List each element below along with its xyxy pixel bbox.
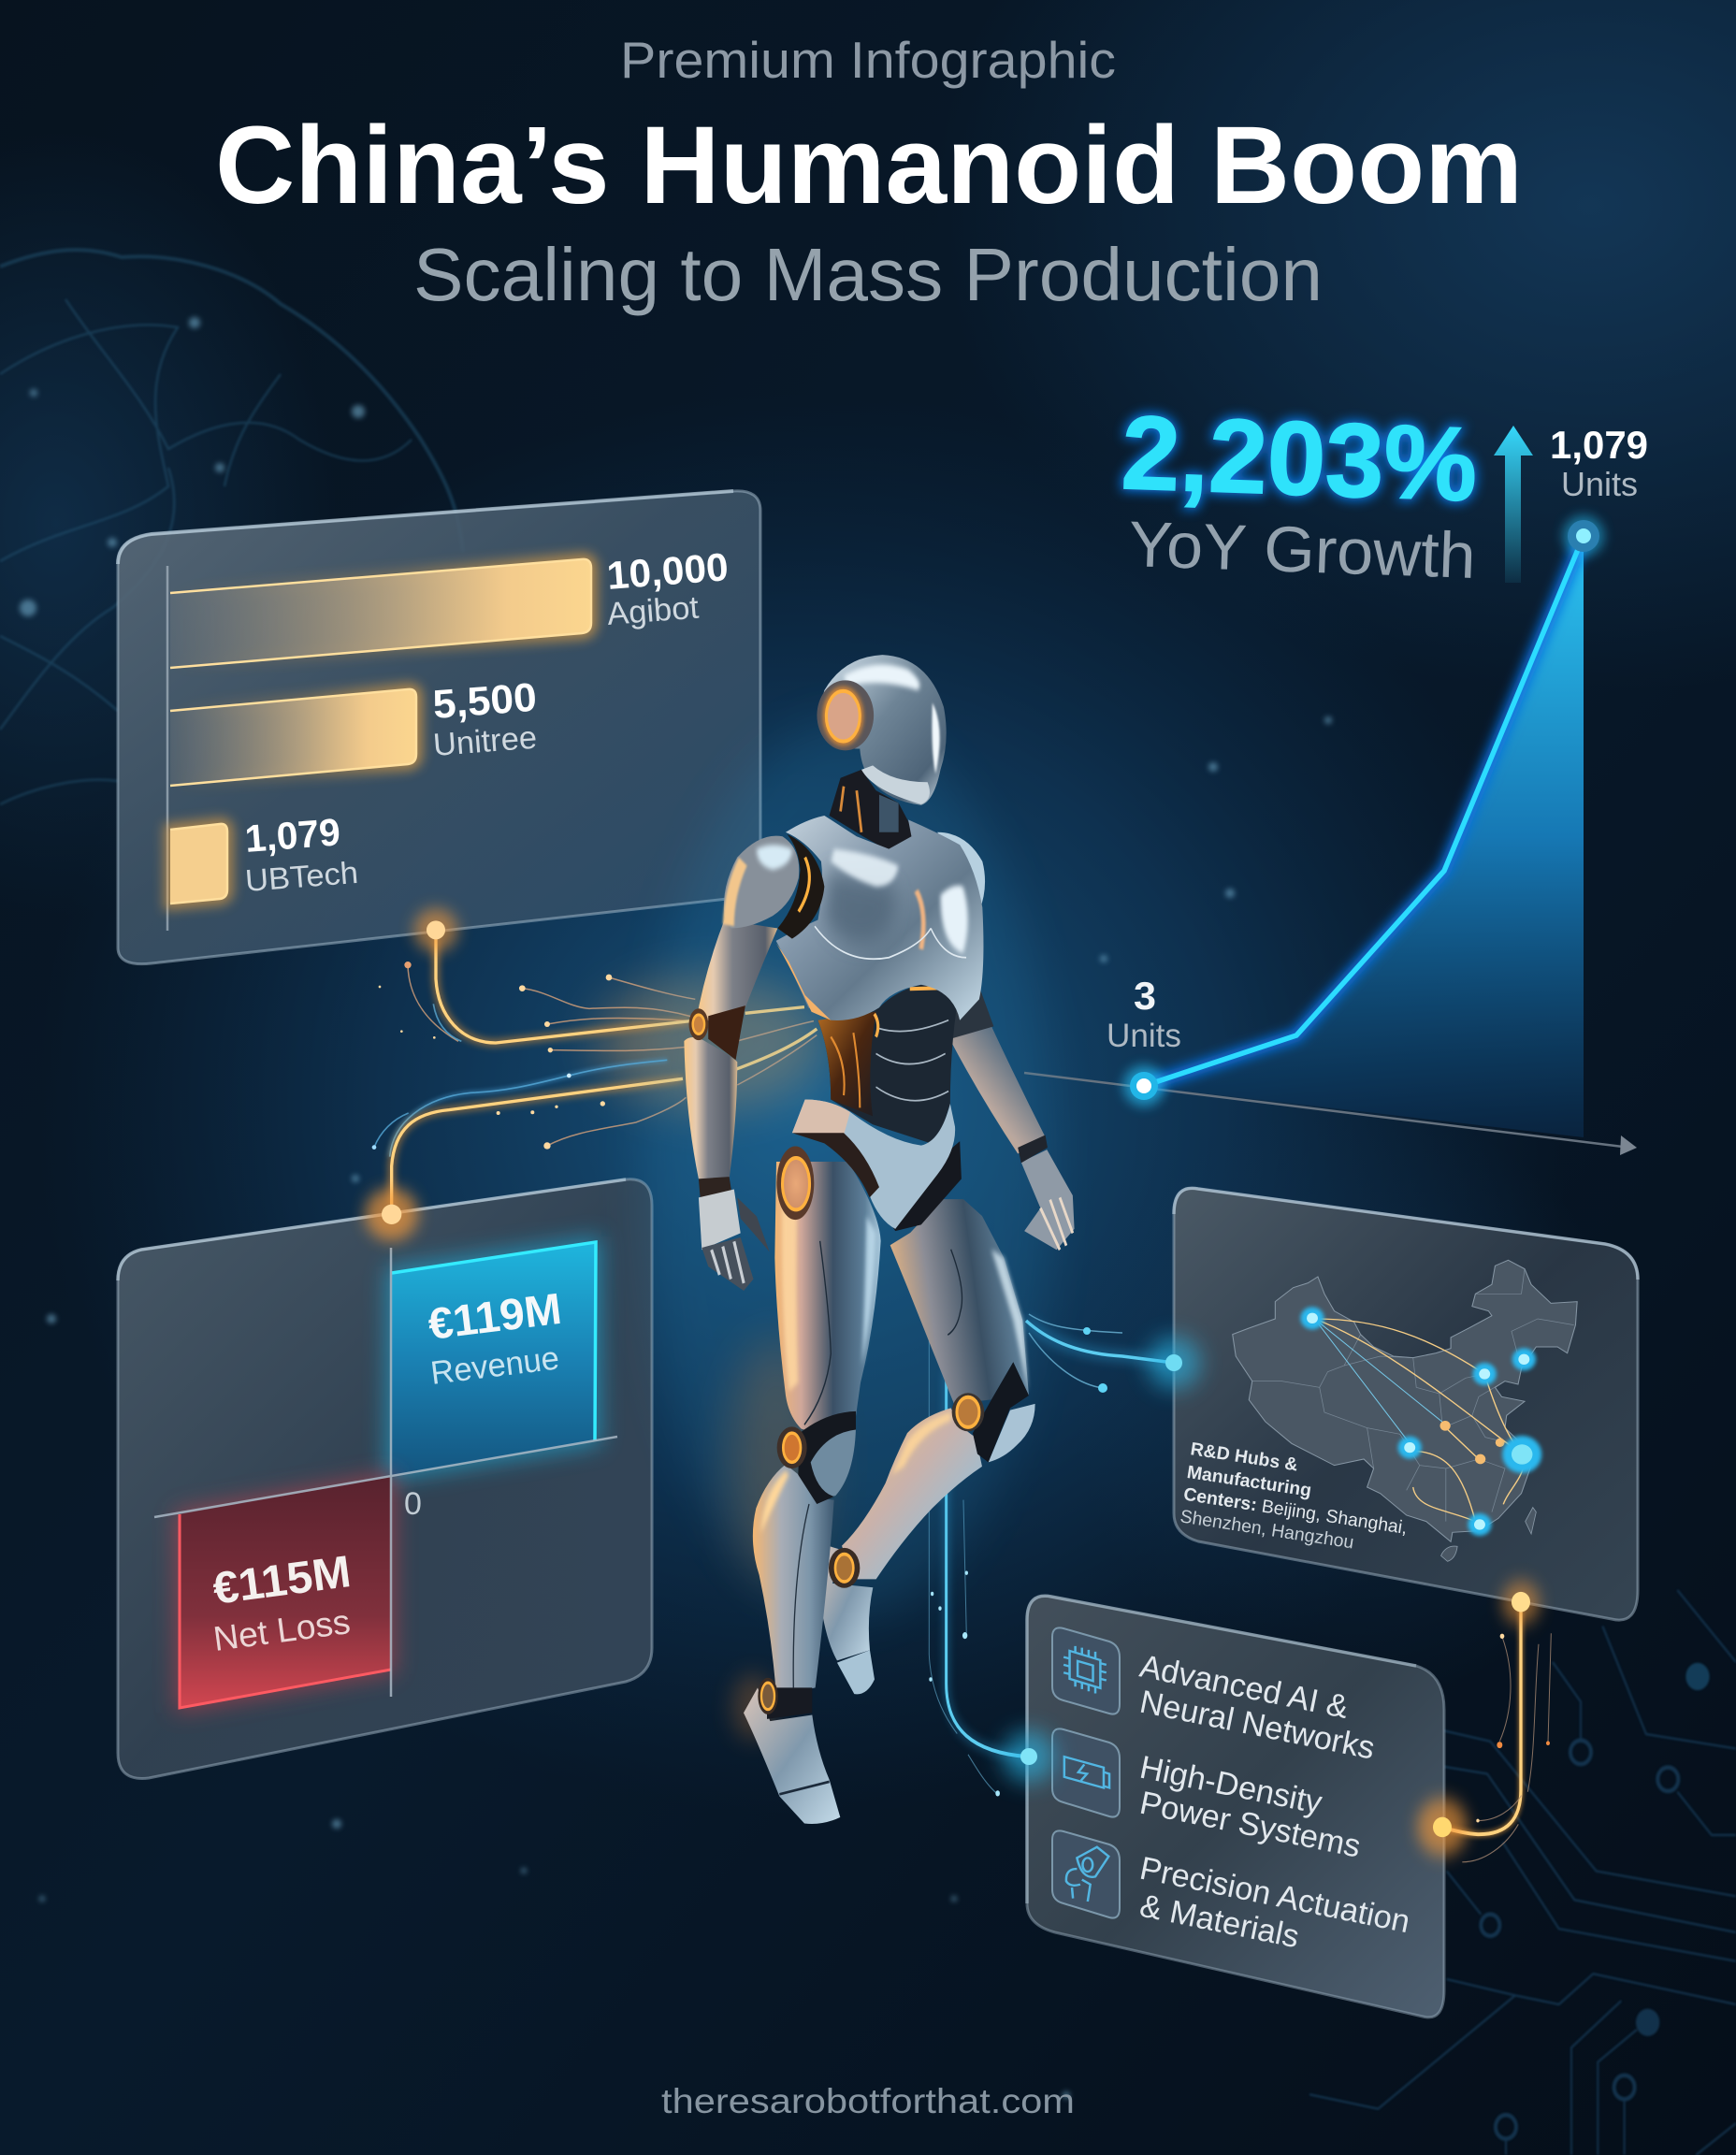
label: 3 units [1107,974,1181,1054]
map of China with hubs [1233,1260,1577,1561]
orange nodes [1439,1421,1505,1464]
routes [1314,1319,1525,1522]
robot figure [641,655,1075,1824]
warm glow behind wires [599,977,823,1108]
label: 10,000 Agibot: Agibot [606,590,701,632]
text: power systems: Power Systems [1136,1786,1364,1865]
country outline [1233,1260,1577,1541]
label: 1,079 UBTech [243,810,359,898]
label: revenue [426,1283,564,1392]
panel: shipments bar chart [118,491,760,964]
title block [215,31,1523,316]
ankle joint [758,1678,778,1714]
footer url: theresarobotforthat.com [661,2082,1075,2120]
growth line [1144,536,1584,1086]
eyebrow: Premium Infographic [620,31,1116,89]
x axis arrow [1024,1073,1637,1155]
net loss bar [180,1477,391,1708]
label: 5,500 Unitree [431,675,538,763]
background circuit traces [1309,1590,1736,2155]
icon: chip [1052,1627,1120,1714]
robot glow [641,720,1052,1741]
callout: 2,203% YoY growth [1120,394,1533,592]
connector: blue wire to map [1026,1314,1174,1393]
end point [1563,515,1604,557]
background neural brain [0,250,463,804]
label: 1,079 units [1550,423,1648,503]
neck [830,770,917,851]
axes [154,1248,617,1697]
start point [1123,1065,1165,1106]
elbow detail [689,1005,745,1060]
abdomen [817,985,957,1146]
blue hubs [1300,1307,1541,1536]
callout: 2,203% YoY growth: 2,203% [1120,394,1479,523]
text: actuation: & Materials [1136,1888,1302,1955]
label: 3 units: Units [1107,1018,1181,1054]
background stars [20,317,1332,2099]
label: 1,079 units: Units [1561,465,1638,503]
connector: blue wire to tech panel [929,1333,1028,1796]
bar: UBTech [170,824,227,904]
near upper arm [695,920,777,1024]
far forearm [948,1024,1046,1154]
pelvis [792,1100,962,1231]
near forearm [684,1037,737,1179]
label: 3 units: 3 [1134,974,1156,1018]
label: 10,000 Agibot [605,544,730,632]
label: 1,079 UBTech: UBTech [244,855,359,898]
map caption: Centers: Beijing, Shanghai, [1182,1484,1409,1539]
icon: battery [1052,1728,1120,1817]
icon: actuator joint [1052,1830,1120,1918]
bar: Agibot [170,559,591,668]
connector dots [365,908,457,1241]
label: 1,079 units: 1,079 [1550,423,1648,467]
panel: revenue vs net loss [118,1179,652,1778]
label: revenue: Revenue [428,1339,561,1392]
right leg [820,1199,1035,1694]
robot upper body [684,655,1075,1291]
ankle joint [829,1548,860,1588]
map caption: R&D Hubs & [1189,1439,1299,1475]
text: advanced AI: Advanced AI & [1136,1649,1352,1726]
label: 5,500 Unitree: 5,500 [431,675,538,728]
text: advanced AI: Neural Networks [1136,1685,1378,1767]
label: net loss: Net Loss [211,1602,353,1658]
text: power systems [1136,1750,1364,1865]
axis [166,566,168,931]
far hand [1018,1135,1075,1250]
label: 1,079 UBTech: 1,079 [243,810,341,861]
area fill [1144,536,1584,1137]
far elbow [950,991,993,1039]
panel: China map [1174,1188,1638,1620]
orange connector dots [1417,1581,1540,1856]
arrow up [1494,426,1533,583]
panel: core technologies [1027,1596,1444,2018]
big number: 2,203% [1120,394,1479,523]
map caption: Manufacturing [1185,1462,1313,1501]
main title: China’s Humanoid Boom [215,104,1523,227]
zero label: 0 [404,1486,422,1522]
eye [817,680,874,750]
text: power systems: High-Density [1136,1750,1325,1821]
chest [776,816,983,1020]
far shoulder [937,832,985,912]
bar: Unitree [170,689,416,786]
label: net loss [210,1547,354,1658]
label: YoY Growth [1127,508,1477,592]
connector dots: blue [1003,1337,1200,1783]
near shoulder [723,834,824,939]
text: advanced AI [1136,1649,1378,1767]
map caption [1179,1439,1416,1561]
label: 10,000 Agibot: 10,000 [605,544,730,598]
connector: orange wire map to tech panel [1417,1581,1551,1862]
knee joint [777,1426,807,1468]
knee joint [952,1393,984,1431]
connector: orange wires from left panels to robot [365,908,817,1241]
near hand [699,1177,770,1291]
subtitle: Scaling to Mass Production [413,233,1323,316]
text: actuation: Precision Actuation [1136,1851,1413,1940]
robot lower body [744,1162,1035,1824]
chart: unit growth [1024,423,1648,1155]
label: 5,500 Unitree: Unitree [432,720,538,763]
label: revenue: €119M [426,1283,564,1349]
hip joint [776,1147,814,1220]
map caption: Shenzhen, Hangzhou [1179,1506,1355,1553]
left leg [744,1162,881,1824]
label: net loss: €115M [210,1547,354,1614]
revenue bar [391,1242,596,1475]
head [817,655,947,805]
